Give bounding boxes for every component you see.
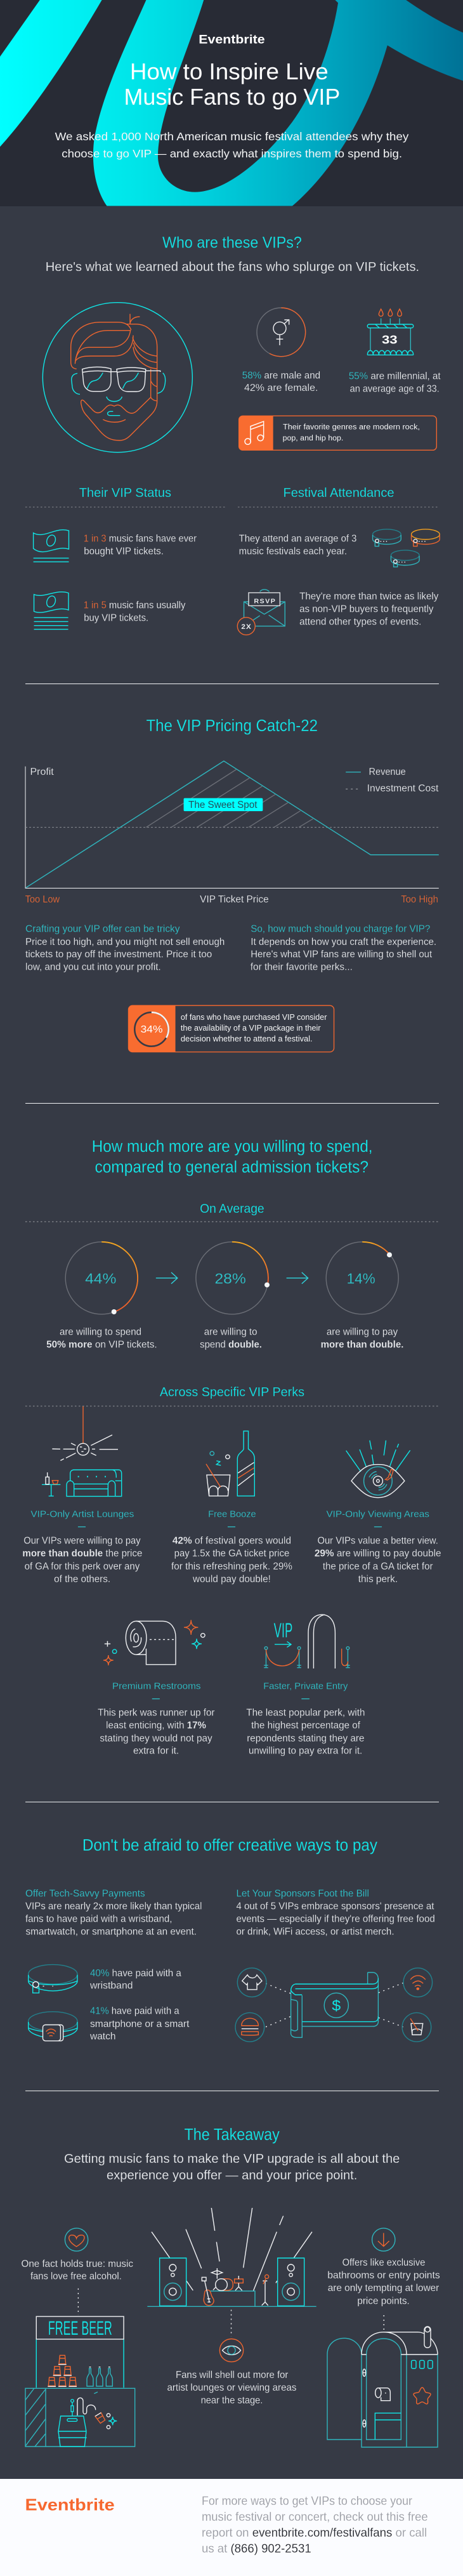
heading: festival attendance: Festival Attendance <box>283 485 395 500</box>
chart: 28% ring <box>196 1242 270 1314</box>
text: call to action: report on eventbrite.com/festivalfans or call <box>202 2526 427 2540</box>
text: lower price points: are only tempting at lower <box>328 2282 440 2294</box>
subheading: on average: On Average <box>200 1202 264 1216</box>
chart: 44% ring: 44% <box>85 1271 116 1287</box>
text: festivals per year <box>239 533 356 557</box>
text: viewing areas: 29% are willing to pay double <box>315 1549 441 1559</box>
icon: artist lounge <box>42 1406 122 1496</box>
text: call to action: us at (866) 902-2531 <box>202 2542 311 2556</box>
intro text: We asked 1,000 North American music festival attendees why they <box>55 129 409 143</box>
icon: gender ring <box>257 308 306 357</box>
text: free booze: for this refreshing perk. 29% <box>171 1561 292 1572</box>
text: viewing areas <box>315 1509 441 1585</box>
text: artist lounges: Our VIPs were willing to pay <box>23 1536 141 1547</box>
illustration: free beer stand: FREE BEER <box>48 2317 112 2339</box>
text: millennial stat: 55% are millennial, at <box>349 371 441 381</box>
text: gender split: 58% are male and <box>242 370 320 381</box>
text: near the stage: near the stage. <box>201 2394 263 2406</box>
icon: one banknote <box>34 530 68 562</box>
icon: free booze <box>206 1431 254 1496</box>
text: premium restrooms <box>98 1681 215 1756</box>
icon: three wristbands <box>373 529 440 567</box>
chart: profit vs ticket price <box>25 761 439 888</box>
text: call to action <box>202 2495 428 2556</box>
text: premium restrooms: stating they would not pay <box>100 1733 212 1744</box>
chart: 14% ring <box>326 1242 398 1314</box>
text: sponsors foot the bill: events — especially if they're offering free food <box>236 1913 435 1924</box>
heading: the takeaway <box>64 2125 400 2183</box>
text: tech-savvy payments: smartwatch, or smartphone at an event. <box>26 1926 197 1937</box>
text: twice as likely: as non-VIP buyers to frequently <box>299 604 434 615</box>
text: lower price points: price points. <box>357 2295 410 2306</box>
text: more than double: are willing to pay <box>327 1326 398 1337</box>
text: lower price points: Offers like exclusive <box>342 2257 425 2268</box>
heading: how much more <box>92 1137 373 1176</box>
callout: 34% of fans: 34% <box>141 1024 163 1035</box>
chart: profit vs ticket price: Revenue <box>368 767 406 777</box>
chart: profit vs ticket price: The Sweet Spot <box>188 800 258 810</box>
text: how much to charge: Here's what VIP fans are willing to shell out <box>251 949 433 960</box>
panel: how much more willing to spend <box>25 1137 438 1351</box>
text: twice as likely: They're more than twice as likely <box>299 591 439 602</box>
text: lower price points: bathrooms or entry points <box>327 2269 440 2281</box>
text: faster private entry <box>246 1681 365 1756</box>
text: 40% wristband <box>89 1967 181 1991</box>
heading: who are these VIPs: Who are these VIPs? <box>162 234 302 251</box>
text: premium restrooms: This perk was runner up for <box>98 1708 215 1718</box>
arrow <box>287 1272 308 1284</box>
heading: the takeaway: experience you offer — and your price point. <box>107 2167 357 2183</box>
text: 41% smartphone: watch <box>89 2031 115 2042</box>
text: sponsors foot the bill: 4 out of 5 VIPs embrace sponsors' presence at <box>236 1900 434 1912</box>
text: more than double: more than double. <box>321 1339 403 1351</box>
panel: VIP pricing catch-22 <box>25 716 439 1052</box>
text: free alcohol: fans love free alcohol. <box>30 2270 122 2282</box>
panel: festival attendance <box>237 485 440 635</box>
text: faster private entry: The least popular perk, with <box>246 1708 365 1718</box>
text: 50% more <box>46 1326 157 1351</box>
heading: creative ways to pay: Don't be afraid to offer creative ways to pay <box>82 1836 377 1854</box>
text: free booze: would pay double! <box>192 1574 271 1585</box>
axis labels: Too Low <box>25 894 60 905</box>
text: 1 in 5: buy VIP tickets. <box>84 612 148 623</box>
panel: who are these VIPs <box>42 234 441 452</box>
text: premium restrooms: least enticing, with 17% <box>106 1721 206 1731</box>
text: near the stage: artist lounges or viewing areas <box>167 2382 296 2393</box>
heading: the takeaway: Getting music fans to make the VIP upgrade is all about the <box>64 2151 400 2166</box>
panel: footer <box>0 2479 463 2576</box>
text: crafting your VIP offer: tickets to pay off the investment. Price it too <box>25 949 212 960</box>
text: artist lounges: of GA for this perk over any <box>25 1561 140 1572</box>
text: how much to charge: So, how much should you charge for VIP? <box>251 924 430 935</box>
callout: 34% of fans: the availability of a VIP package in their <box>181 1023 321 1033</box>
text: 1 in 3: 1 in 3 music fans have ever <box>84 533 197 544</box>
chart: 28% ring: 28% <box>214 1271 246 1287</box>
text: sponsors foot the bill <box>236 1888 435 1937</box>
text: artist lounges: VIP-Only Artist Lounges <box>30 1509 134 1520</box>
text: tech-savvy payments <box>25 1888 202 1937</box>
icon: RSVP envelope: RSVP <box>254 598 275 605</box>
panel: across specific VIP perks <box>22 1385 441 1756</box>
text: lower price points <box>327 2228 440 2331</box>
title: How to Inspire Live <box>130 59 329 84</box>
text: festivals per year: They attend an average of 3 <box>239 533 356 544</box>
axis labels: Too High <box>401 894 438 905</box>
text: near the stage <box>167 2310 296 2406</box>
intro text <box>55 129 409 160</box>
text: free booze: Free Booze <box>208 1509 256 1520</box>
callout: favorite genres <box>239 416 436 450</box>
text: call to action: For more ways to get VIPs to choose your <box>202 2495 412 2508</box>
icon: RSVP envelope <box>237 590 285 635</box>
text: twice as likely: attend other types of events. <box>299 616 421 627</box>
text: 40% wristband: 40% have paid with a <box>90 1967 181 1979</box>
text: viewing areas: Our VIPs value a better view. <box>317 1536 438 1547</box>
text: crafting your VIP offer: Price it too high, and you might not sell enough <box>25 937 225 948</box>
icon: VIP fan face <box>42 303 192 452</box>
text: faster private entry: repondents stating they are <box>247 1733 365 1744</box>
text: free alcohol: One fact holds true: music <box>22 2258 133 2269</box>
text: 41% smartphone: smartphone or a smart <box>90 2018 190 2030</box>
text: tech-savvy payments: VIPs are nearly 2x more likely than typical <box>25 1900 202 1912</box>
panel: creative ways to pay <box>25 1836 435 2042</box>
icon: birthday cake: 33 <box>382 333 398 347</box>
text: faster private entry: unwilling to pay extra for it. <box>249 1746 362 1756</box>
text: sponsors foot the bill: Let Your Sponsors Foot the Bill <box>236 1888 369 1899</box>
title <box>124 59 340 110</box>
axis labels <box>25 894 438 905</box>
icon: private entry <box>264 1615 350 1668</box>
logo: Eventbrite: Eventbrite <box>199 33 265 46</box>
callout: 34% of fans: decision whether to attend a festival. <box>181 1034 313 1043</box>
icon: wristband <box>29 1965 77 1993</box>
callout: 34% of fans: of fans who have purchased VIP consider <box>181 1012 327 1022</box>
text: artist lounges <box>22 1509 143 1585</box>
icon: sponsor banner with perks: $ <box>332 1998 341 2014</box>
axis labels: VIP Ticket Price <box>200 894 269 905</box>
text: 1 in 5: 1 in 5 music fans usually <box>84 600 186 611</box>
text: spend double <box>200 1326 262 1351</box>
text: millennial stat <box>349 371 441 394</box>
text: free alcohol <box>22 2258 133 2315</box>
text: free booze <box>171 1509 292 1585</box>
heading: who are these VIPs: Here's what we learned about the fans who splurge on VIP tickets. <box>46 260 419 274</box>
text: call to action: music festival or concert, check out this free <box>202 2511 428 2524</box>
text: more than double <box>321 1326 403 1351</box>
text: millennial stat: an average age of 33. <box>350 383 440 394</box>
text: spend double: spend double. <box>200 1339 262 1351</box>
text: spend double: are willing to <box>204 1326 258 1337</box>
arrow <box>156 1272 178 1284</box>
heading: their VIP status: Their VIP Status <box>79 485 171 500</box>
icon: toilet roll <box>103 1620 205 1665</box>
callout: favorite genres: pop, and hip hop. <box>283 433 343 442</box>
chart: profit vs ticket price: Profit <box>30 767 54 777</box>
text: premium restrooms: extra for it. <box>133 1746 179 1756</box>
intro text: choose to go VIP — and exactly what inspires them to spend big. <box>62 147 402 160</box>
text: premium restrooms: Premium Restrooms <box>112 1681 201 1692</box>
heading: VIP pricing catch-22: The VIP Pricing Catch-22 <box>146 716 318 735</box>
text: twice as likely <box>299 591 439 627</box>
heading: who are these VIPs <box>46 234 419 274</box>
subheading: across specific VIP perks: Across Specific VIP Perks <box>160 1385 304 1399</box>
callout: favorite genres: Their favorite genres are modern rock, <box>283 423 420 432</box>
text: 40% wristband: wristband <box>89 1980 133 1991</box>
heading: the takeaway: The Takeaway <box>185 2125 280 2144</box>
text: 1 in 3 <box>84 533 197 557</box>
illustration: premium restroom <box>327 2327 438 2447</box>
text: crafting your VIP offer <box>25 924 225 972</box>
chart: 14% ring: 14% <box>347 1271 375 1287</box>
text: 1 in 3: bought VIP tickets. <box>84 546 164 557</box>
illustration: free beer stand <box>25 2316 135 2447</box>
text: faster private entry: the highest percentage of <box>251 1721 361 1731</box>
callout: 34% of fans <box>129 1005 334 1052</box>
text: crafting your VIP offer: low, and you cut into your profit. <box>25 962 161 972</box>
text: 50% more: 50% more on VIP tickets. <box>46 1339 157 1351</box>
text: how much to charge: for their favorite perks... <box>251 962 353 972</box>
text: free booze: 42% of festival goers would <box>173 1536 291 1547</box>
text: sponsors foot the bill: or drink, WiFi access, or artist merch. <box>236 1926 395 1937</box>
text: 1 in 5 <box>84 600 186 623</box>
text: 41% smartphone <box>89 2005 190 2042</box>
title: Music Fans to go VIP <box>124 84 340 110</box>
panel: hero header <box>0 0 463 206</box>
text: near the stage: Fans will shell out more for <box>176 2369 289 2381</box>
icon: private entry: VIP <box>274 1619 292 1642</box>
logo: Eventbrite orange: Eventbrite <box>25 2495 115 2514</box>
text: artist lounges: more than double the price <box>22 1549 143 1559</box>
heading: how much more: How much more are you willing to spend, <box>92 1137 373 1156</box>
text: 41% smartphone: 41% have paid with a <box>90 2005 179 2016</box>
text: how much to charge: It depends on how you craft the experience. <box>251 937 436 948</box>
icon: smart watch <box>29 2012 77 2041</box>
text: gender split: 42% are female. <box>244 382 318 393</box>
text: gender split <box>242 370 320 393</box>
text: viewing areas: VIP-Only Viewing Areas <box>326 1509 429 1520</box>
icon: viewing area eye <box>346 1441 410 1498</box>
text: tech-savvy payments: Offer Tech-Savvy Payments <box>25 1888 145 1899</box>
panel: the takeaway <box>22 2125 440 2447</box>
icon: birthday cake <box>367 309 414 355</box>
text: faster private entry: Faster, Private Entry <box>263 1681 348 1692</box>
text: festivals per year: music festivals each year. <box>239 546 347 557</box>
icon: sponsor banner with perks <box>235 1968 433 2042</box>
text: 50% more: are willing to spend <box>60 1326 141 1337</box>
icon: stack of banknotes <box>34 592 68 630</box>
text: how much to charge <box>251 924 436 972</box>
text: viewing areas: this perk. <box>358 1574 398 1585</box>
text: tech-savvy payments: fans to have paid with a wristband, <box>25 1913 172 1924</box>
chart: profit vs ticket price: Investment Cost <box>367 783 439 794</box>
icon: RSVP envelope: 2X <box>241 623 251 631</box>
chart: 44% ring <box>65 1242 138 1314</box>
text: viewing areas: the price of a GA ticket for <box>323 1561 433 1572</box>
panel: VIP status <box>25 485 226 630</box>
illustration: concert stage <box>147 2208 316 2306</box>
decorative ribbon <box>0 0 463 206</box>
text: free booze: pay 1.5x the GA ticket price <box>174 1549 289 1559</box>
heading: how much more: compared to general admission tickets? <box>95 1158 368 1176</box>
icon: heart <box>65 2228 88 2251</box>
text: artist lounges: of the others. <box>54 1574 110 1585</box>
text: crafting your VIP offer: Crafting your VIP offer can be tricky <box>25 924 180 935</box>
